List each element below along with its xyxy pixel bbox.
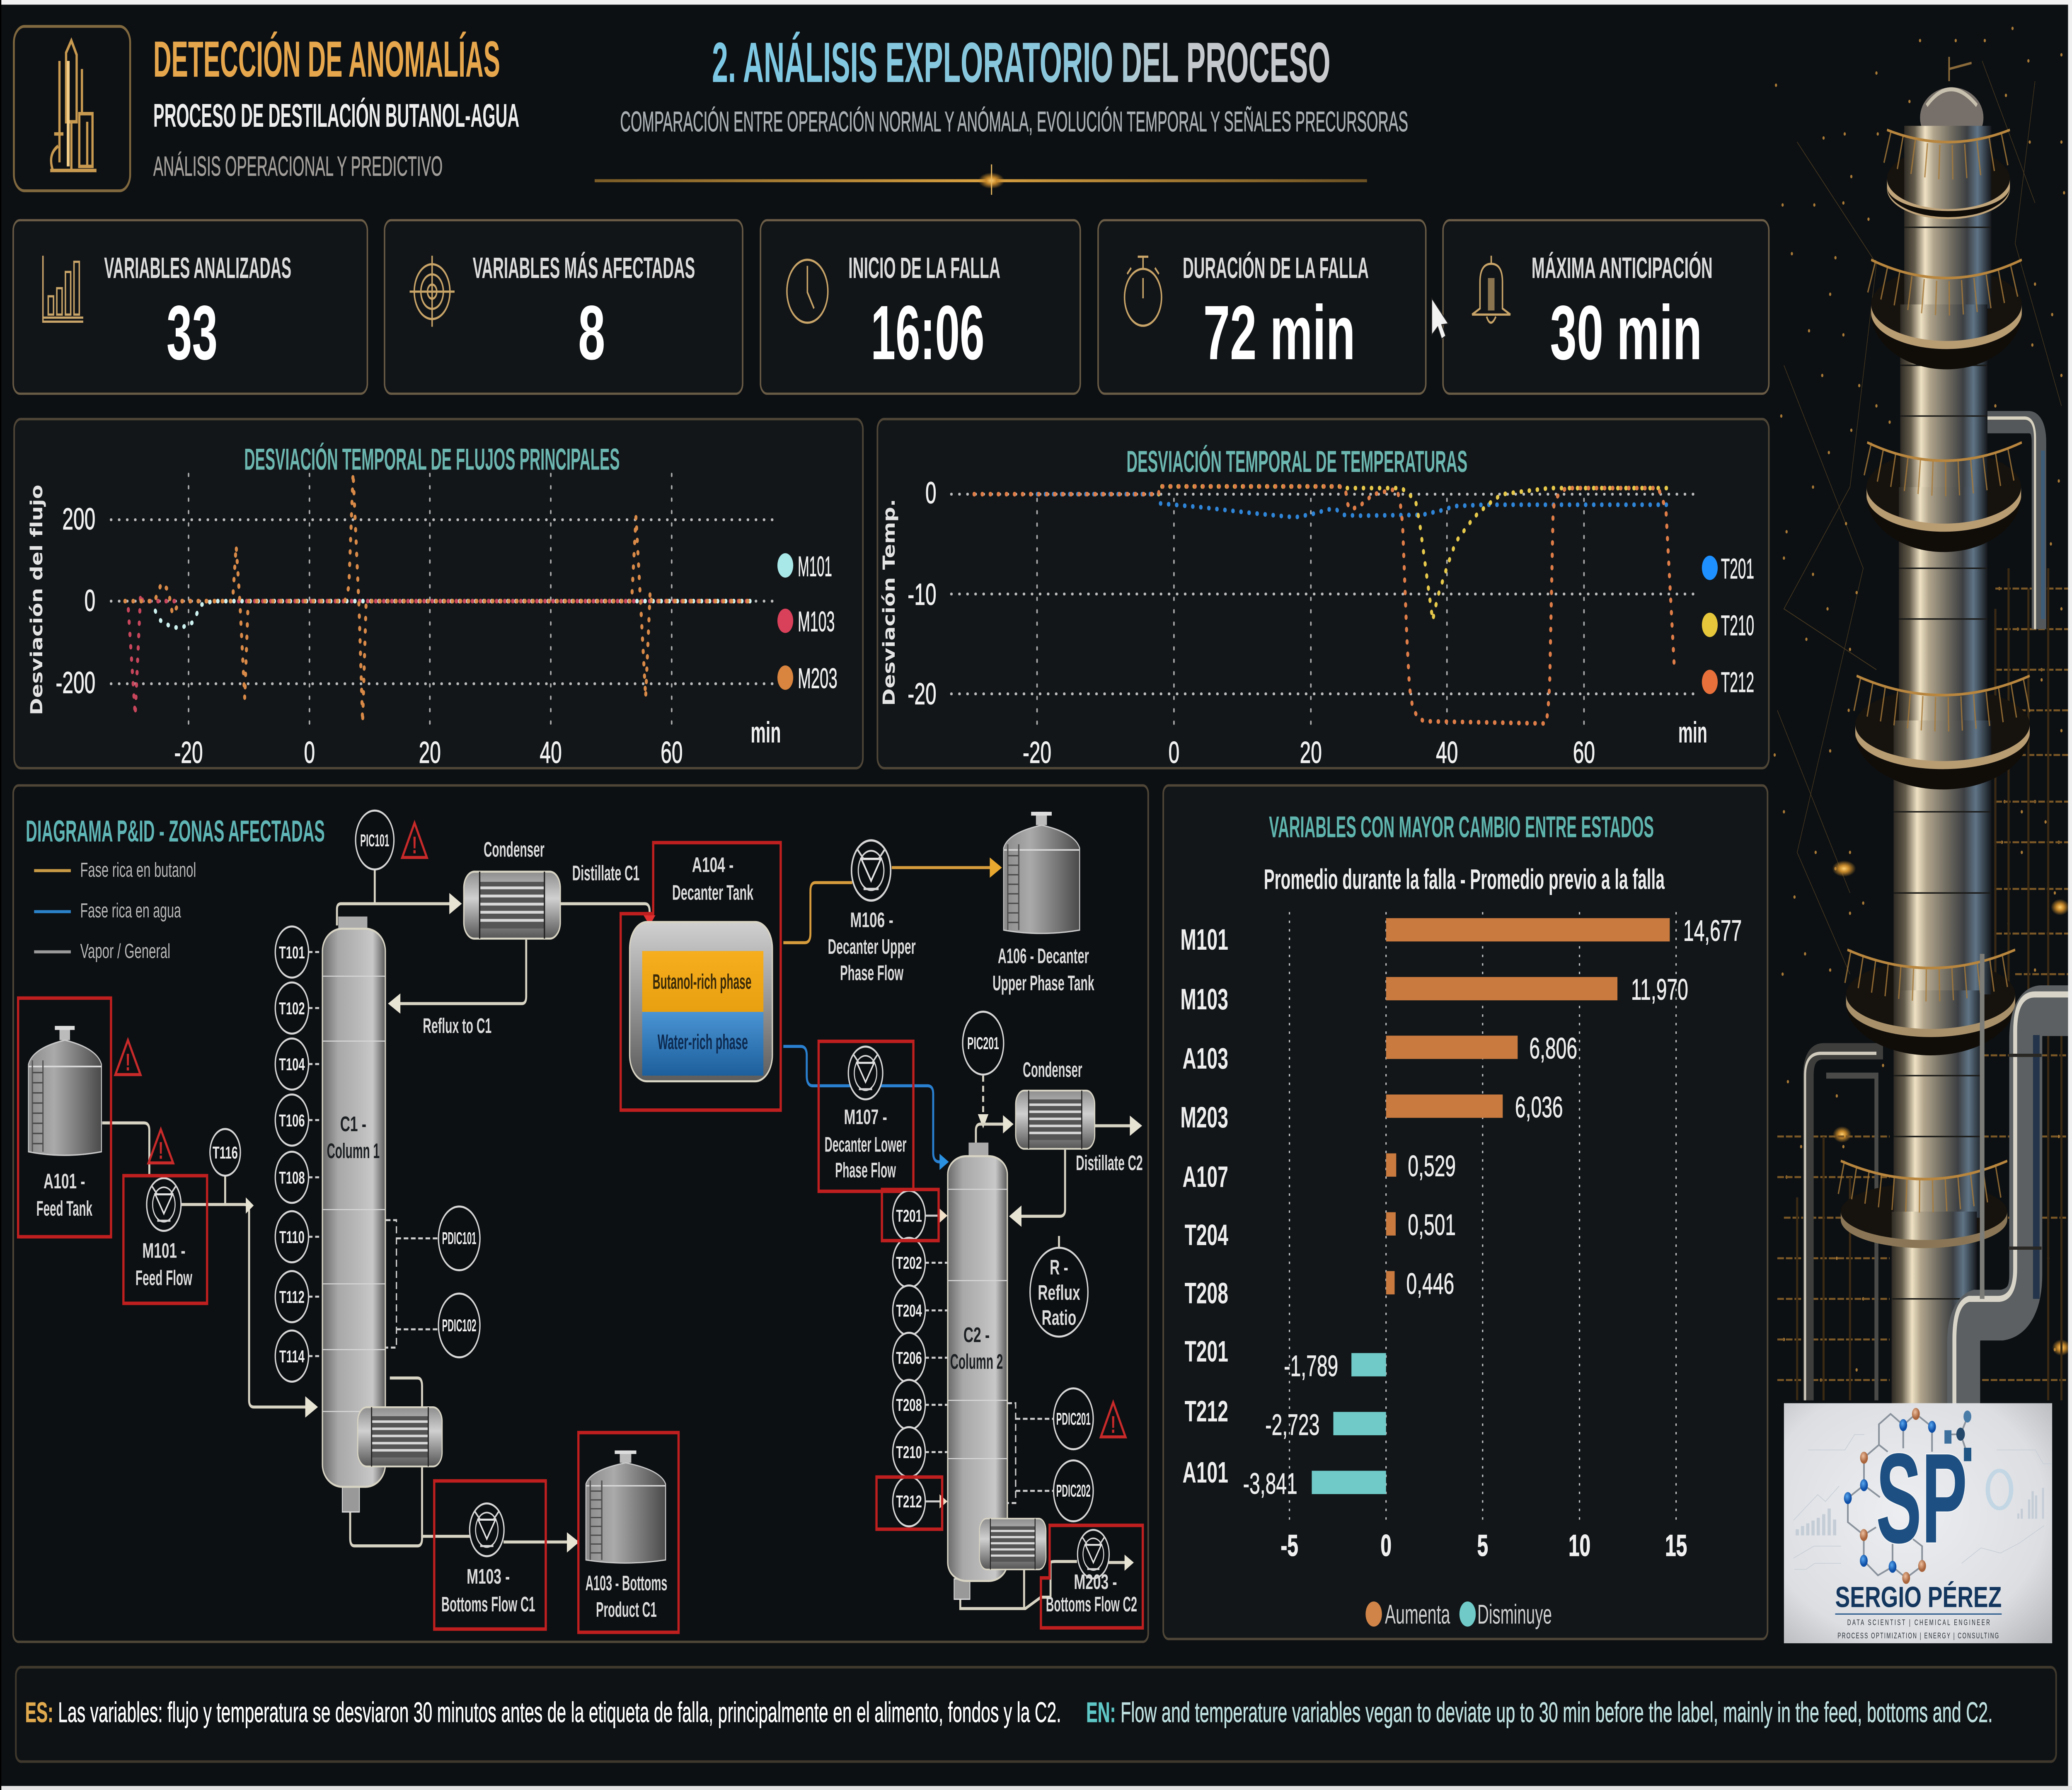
axis labels: 20 xyxy=(1300,736,1322,770)
axis labels: 0 xyxy=(85,584,95,618)
value labels: -3,841 xyxy=(1243,1467,1297,1500)
equipment: A106 upper phase tank xyxy=(992,812,1094,995)
category labels: T212 xyxy=(1185,1395,1228,1428)
brand subtitle: PROCESO DE DESTILACIÓN BUTANOL-AGUA xyxy=(153,97,519,134)
category labels: T201 xyxy=(1185,1335,1228,1368)
C1 temperature sensors: T106 xyxy=(279,1110,305,1130)
column C2: Column 2 xyxy=(950,1350,1003,1374)
C2 temperature sensors: T210 xyxy=(896,1442,922,1462)
equipment: A106 upper phase tank: A106 - Decanter xyxy=(998,945,1089,968)
category labels: A103 xyxy=(1182,1042,1228,1075)
panel: state change bar chart xyxy=(1163,786,1767,1639)
axis labels: 40 xyxy=(540,736,562,770)
panel heading: DIAGRAMA P&ID - ZONAS AFECTADAS xyxy=(26,815,325,849)
equipment: M107 lower phase flow: M107 - xyxy=(844,1105,887,1129)
label: distillate C1: Distillate C1 xyxy=(572,862,639,885)
column C1 xyxy=(322,917,385,1512)
series T212 xyxy=(967,486,1674,723)
value labels: 0,446 xyxy=(1406,1267,1454,1300)
equipment: M101 feed flow xyxy=(123,1176,207,1303)
category labels: A101 xyxy=(1182,1456,1228,1489)
warning: PIC101 xyxy=(402,823,427,859)
KPI card: variables más afectadas: 8 xyxy=(578,290,605,376)
value labels: -2,723 xyxy=(1265,1408,1319,1441)
x axis labels xyxy=(1280,1529,1687,1563)
chart title: DESVIACIÓN TEMPORAL DE TEMPERATURAS xyxy=(1126,445,1467,479)
PDIC101 and PDIC102 controllers: PDIC102 xyxy=(442,1316,477,1335)
axis labels: 200 xyxy=(62,502,95,536)
series T201 xyxy=(1037,494,1670,517)
KPI card: variables más afectadas xyxy=(385,220,743,394)
English insight: EN: Flow and temperature variables vegan to deviate up to 30 min before the label, mainly in the feed, bottoms and C2. xyxy=(1086,1697,1993,1728)
brand title: DETECCIÓN DE ANOMALÍAS xyxy=(153,31,500,87)
chart title: DESVIACIÓN TEMPORAL DE FLUJOS PRINCIPALES xyxy=(244,443,620,477)
reflux ratio xyxy=(1030,1248,1088,1337)
section subtitle: COMPARACIÓN ENTRE OPERACIÓN NORMAL Y ANÓMALA, EVOLUCIÓN TEMPORAL Y SEÑALES PRECURSORAS xyxy=(620,106,1408,138)
warning: PIC101: ! xyxy=(412,831,417,859)
warning: PDIC201: ! xyxy=(1111,1411,1116,1438)
C2 temperature sensors: T206 xyxy=(896,1348,922,1368)
category labels: M101 xyxy=(1180,923,1228,956)
C1 temperature sensors: T108 xyxy=(279,1168,305,1188)
KPI card: inicio de la falla: 16:06 xyxy=(871,290,985,376)
bars increasing xyxy=(1386,918,1670,1294)
equipment: A103 bottoms product xyxy=(579,1432,678,1632)
KPI card: inicio de la falla: INICIO DE LA FALLA xyxy=(848,252,1000,284)
equipment: A106 upper phase tank: Upper Phase Tank xyxy=(992,972,1094,995)
equipment: A101 feed tank xyxy=(18,998,111,1237)
axis labels: -20 xyxy=(174,736,203,770)
process pipes xyxy=(102,857,1142,1609)
KPI card: máxima anticipación: 30 min xyxy=(1550,290,1702,376)
equipment: A101 feed tank: Feed Tank xyxy=(36,1197,92,1221)
C1 temperature sensors: T112 xyxy=(279,1287,305,1307)
KPI card: inicio de la falla xyxy=(760,220,1080,394)
legend: M101 xyxy=(798,551,832,583)
value labels: 14,677 xyxy=(1683,914,1742,947)
equipment: M107 lower phase flow xyxy=(818,1041,913,1191)
chart title: VARIABLES CON MAYOR CAMBIO ENTRE ESTADOS xyxy=(1269,810,1654,844)
equipment: M101 feed flow: Feed Flow xyxy=(136,1266,192,1290)
legend: Disminuye xyxy=(1477,1599,1552,1630)
C1 temperature sensors: T101 xyxy=(279,943,305,962)
equipment: A104 decanter: Water-rich phase xyxy=(658,1030,748,1054)
PDIC101 and PDIC102 controllers: PDIC101 xyxy=(442,1229,477,1248)
condenser C2 xyxy=(1016,1058,1095,1149)
equipment: M103 bottoms flow: M103 - xyxy=(467,1565,510,1589)
C1 temperature sensors: T110 xyxy=(279,1227,305,1247)
logo: Sergio Pérez xyxy=(1784,1403,2052,1643)
logo: Sergio Pérez: DATA SCIENTIST | CHEMICAL ENGINEER xyxy=(1847,1618,1990,1627)
equipment: M106 upper phase flow: M106 - xyxy=(850,908,893,932)
axis labels: 20 xyxy=(419,736,441,770)
equipment: M203 bottoms flow: Bottoms Flow C2 xyxy=(1046,1593,1137,1616)
axis labels: 0 xyxy=(925,477,937,510)
axis labels xyxy=(27,485,781,770)
panel: temperature deviation chart xyxy=(877,419,1769,770)
axis labels: 60 xyxy=(661,736,683,770)
x axis labels: -5 xyxy=(1280,1529,1298,1563)
KPI card: máxima anticipación: MÁXIMA ANTICIPACIÓN xyxy=(1532,252,1713,284)
axis labels: min xyxy=(1678,716,1707,749)
line legend: Vapor / General xyxy=(80,940,170,963)
equipment: A104 decanter: A104 - xyxy=(692,854,733,877)
C2 temperature sensors: T202 xyxy=(896,1253,922,1273)
axis labels: Desviación del flujo xyxy=(27,485,46,715)
PDIC201 and PDIC202 controllers: PDIC201 xyxy=(1056,1409,1091,1429)
KPI card: variables más afectadas: VARIABLES MÁS AFECTADAS xyxy=(473,252,695,284)
reflux ratio: Ratio xyxy=(1042,1306,1076,1330)
equipment: A104 decanter: Decanter Tank xyxy=(672,881,754,905)
equipment: M106 upper phase flow xyxy=(828,840,916,985)
C2 temperature sensors: T208 xyxy=(896,1395,922,1415)
PIC201 controller: PIC201 xyxy=(967,1033,999,1053)
x axis labels: 5 xyxy=(1477,1529,1488,1563)
C1 temperature sensors xyxy=(275,926,322,1382)
series M101 xyxy=(155,601,753,627)
equipment: M203 bottoms flow xyxy=(1041,1525,1143,1628)
label: distillate C2: Distillate C2 xyxy=(1076,1151,1143,1175)
legend: T210 xyxy=(1721,610,1754,641)
warning: M101 xyxy=(148,1130,173,1164)
legend: T212 xyxy=(1721,667,1754,699)
legend xyxy=(1365,1599,1552,1630)
value labels xyxy=(1243,914,1742,1500)
sensor T116 xyxy=(210,1129,240,1176)
equipment: A104 decanter: Butanol-rich phase xyxy=(653,970,751,994)
KPI card: variables analizadas: VARIABLES ANALIZADAS xyxy=(104,252,291,284)
reboiler C2 xyxy=(980,1519,1046,1570)
PDIC101 and PDIC102 controllers xyxy=(386,1207,480,1357)
warning: M101: ! xyxy=(158,1137,163,1164)
equipment: M101 feed flow: M101 - xyxy=(142,1239,185,1263)
x axis labels: 10 xyxy=(1569,1529,1590,1563)
gold divider xyxy=(595,164,1367,195)
condenser C2: Condenser xyxy=(1023,1058,1082,1082)
warning: A101: ! xyxy=(125,1048,131,1076)
KPI card: variables analizadas xyxy=(13,220,367,394)
reflux ratio: R - xyxy=(1050,1256,1068,1280)
icon: mouse cursor xyxy=(1432,298,1448,339)
value labels: 0,529 xyxy=(1408,1149,1456,1183)
category labels: T208 xyxy=(1185,1277,1228,1310)
category labels: T204 xyxy=(1185,1219,1228,1251)
equipment: A104 decanter xyxy=(621,843,781,1110)
logo: Sergio Pérez: SERGIO PÉREZ xyxy=(1835,1581,2002,1613)
axis labels: 0 xyxy=(1169,736,1179,770)
panel: flow deviation chart xyxy=(14,419,863,770)
C1 temperature sensors: T104 xyxy=(279,1055,305,1074)
bars decreasing xyxy=(1312,1353,1386,1494)
C2 temperature sensors: T212 xyxy=(896,1492,922,1512)
column C2 xyxy=(948,1143,1007,1599)
column C1: Column 1 xyxy=(327,1139,380,1163)
axis labels: -10 xyxy=(908,578,937,612)
logo: Sergio Pérez: PROCESS OPTIMIZATION | ENERGY | CONSULTING xyxy=(1837,1632,1999,1640)
x axis labels: 15 xyxy=(1665,1529,1687,1563)
category labels: M103 xyxy=(1180,983,1228,1016)
axis labels: -200 xyxy=(56,666,95,700)
KPI card: duración de la falla: DURACIÓN DE LA FALLA xyxy=(1183,252,1369,284)
panel: P&ID diagram xyxy=(13,786,1148,1642)
value labels: -1,789 xyxy=(1284,1350,1338,1382)
value labels: 6,806 xyxy=(1529,1032,1577,1065)
chart subtitle: Promedio durante la falla - Promedio previo a la falla xyxy=(1264,864,1665,895)
equipment: M106 upper phase flow: Phase Flow xyxy=(840,962,903,985)
legend: M103 xyxy=(798,606,835,638)
Spanish insight: ES: Las variables: flujo y temperatura se desviaron 30 minutos antes de la etiqueta de falla, principalmente en el alimento, fondos y la C2. xyxy=(25,1697,1061,1728)
header logo box xyxy=(14,27,130,191)
reflux ratio: Reflux xyxy=(1038,1281,1080,1305)
PIC101 controller: PIC101 xyxy=(360,831,389,850)
equipment: A103 bottoms product: A103 - Bottoms xyxy=(586,1572,667,1595)
KPI card: duración de la falla: 72 min xyxy=(1203,290,1355,376)
warning: PDIC201 xyxy=(1101,1402,1126,1438)
legend: Aumenta xyxy=(1385,1599,1450,1630)
footer insight bar xyxy=(16,1667,2056,1761)
PDIC201 and PDIC202 controllers: PDIC202 xyxy=(1056,1481,1091,1501)
label: reflux to C1: Reflux to C1 xyxy=(423,1014,491,1038)
C2 temperature sensors: T201 xyxy=(896,1206,922,1226)
line legend: Fase rica en butanol xyxy=(80,859,196,881)
equipment: M107 lower phase flow: Decanter Lower xyxy=(825,1133,907,1156)
category labels: A107 xyxy=(1182,1160,1228,1193)
C2 temperature sensors: T204 xyxy=(896,1301,922,1321)
value labels: 0,501 xyxy=(1408,1208,1456,1241)
brand tagline: ANÁLISIS OPERACIONAL Y PREDICTIVO xyxy=(153,151,443,181)
line legend: Fase rica en agua xyxy=(80,899,181,922)
condenser C1 xyxy=(464,838,560,939)
axis labels: -20 xyxy=(1023,736,1051,770)
equipment: M107 lower phase flow: Phase Flow xyxy=(835,1159,896,1182)
x axis labels: 0 xyxy=(1380,1529,1392,1563)
reboiler C1 xyxy=(358,1407,442,1466)
KPI card: máxima anticipación xyxy=(1443,220,1769,394)
warning: A101 xyxy=(115,1040,140,1076)
sensor T116: T116 xyxy=(213,1143,238,1162)
series T210 xyxy=(1159,486,1670,620)
category labels xyxy=(1180,923,1228,1489)
value labels: 11,970 xyxy=(1631,973,1688,1006)
column C2: C2 - xyxy=(963,1323,990,1347)
series M203 xyxy=(125,473,753,723)
equipment: A101 feed tank: A101 - xyxy=(44,1170,85,1193)
equipment: M203 bottoms flow: M203 - xyxy=(1074,1570,1117,1594)
legend: M203 xyxy=(798,663,838,694)
category labels: M203 xyxy=(1180,1101,1228,1134)
axis labels: 60 xyxy=(1573,736,1595,770)
axis labels: Desviación Temp. xyxy=(880,499,899,706)
KPI card: variables analizadas: 33 xyxy=(167,290,218,376)
axis labels: 0 xyxy=(304,736,315,770)
PIC201 controller xyxy=(963,1012,1004,1074)
series M103 xyxy=(128,593,753,715)
decorative tower illustration xyxy=(1775,29,2071,1404)
PDIC201 and PDIC202 controllers xyxy=(1007,1388,1093,1522)
column C1: C1 - xyxy=(340,1113,366,1136)
equipment: M103 bottoms flow: Bottoms Flow C1 xyxy=(441,1593,535,1616)
equipment: M103 bottoms flow xyxy=(434,1481,546,1629)
logo: Sergio Pérez: SP xyxy=(1876,1427,1967,1570)
KPI card: duración de la falla xyxy=(1098,220,1426,394)
legend xyxy=(777,551,838,694)
axis labels: min xyxy=(750,716,781,749)
C2 temperature sensors xyxy=(876,1190,947,1529)
C1 temperature sensors: T114 xyxy=(279,1347,305,1366)
legend: T201 xyxy=(1721,553,1754,585)
axis labels: 40 xyxy=(1436,736,1458,770)
line legend xyxy=(34,859,196,963)
legend xyxy=(1702,553,1754,699)
C1 temperature sensors: T102 xyxy=(279,999,305,1018)
value labels: 6,036 xyxy=(1515,1091,1563,1124)
axis labels xyxy=(880,477,1707,770)
equipment: M106 upper phase flow: Decanter Upper xyxy=(828,935,916,959)
axis labels: -20 xyxy=(908,677,937,711)
section title: 2. ANÁLISIS EXPLORATORIO DEL PROCESO xyxy=(712,30,1330,94)
condenser C1: Condenser xyxy=(484,838,545,861)
PIC101 controller xyxy=(356,810,394,869)
equipment: A103 bottoms product: Product C1 xyxy=(596,1598,657,1622)
